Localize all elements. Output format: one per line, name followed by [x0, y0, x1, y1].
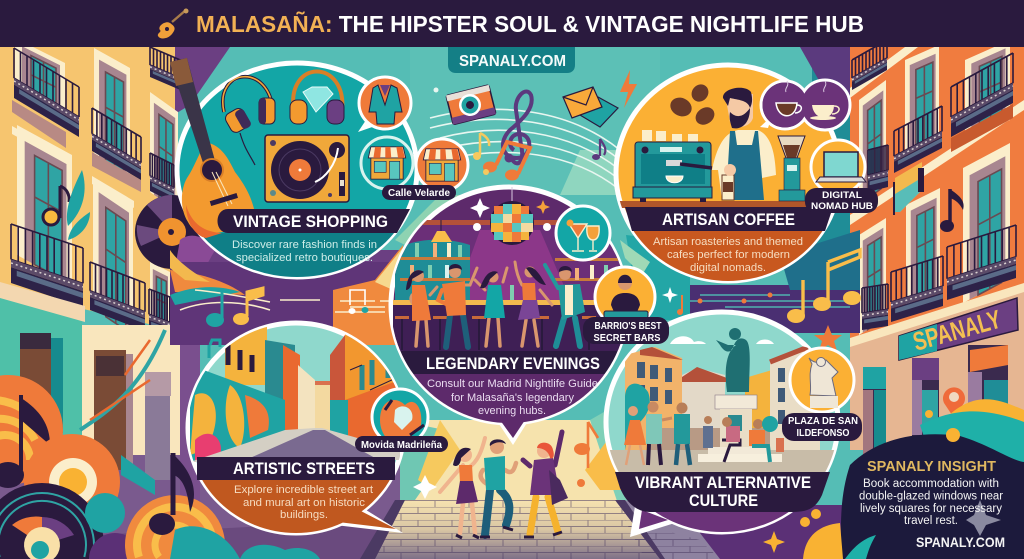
- panel: artistic streets: [188, 320, 448, 540]
- banner: artisan coffee: [625, 207, 833, 231]
- text: legendary evenings description: for Malasaña's legendary: [451, 392, 574, 404]
- heading: spanaly insight: SPANALY INSIGHT: [867, 458, 996, 475]
- illustration: bar interior: [393, 186, 627, 351]
- icon: laptop badge: [811, 140, 866, 194]
- icon: barista: [712, 88, 776, 200]
- dancer: man in teal shirt: [480, 439, 516, 537]
- label: plaza de san ildefonso: PLAZA DE SAN: [788, 416, 858, 427]
- banner: artisan coffee: ARTISAN COFFEE: [662, 210, 795, 229]
- text: vintage shopping description: specialized retro boutiques.: [236, 252, 373, 264]
- text: vintage shopping description: [232, 239, 377, 264]
- label: digital nomad hub: DIGITAL: [822, 190, 862, 201]
- text: legendary evenings description: [427, 378, 598, 417]
- text: artisan coffee description: Artisan roasteries and themed: [653, 236, 803, 248]
- icon: cocktails badge: [556, 206, 610, 260]
- dancers: bar crowd: [406, 262, 585, 347]
- icon: statue badge: [790, 348, 854, 412]
- panel: vibrant alternative culture: [605, 312, 862, 542]
- icon: shop badge teal: [361, 137, 413, 189]
- icon: headphones and diamond: [290, 72, 344, 124]
- label: barrio's best secret bars: [583, 317, 669, 344]
- icon: vinyl record: [135, 195, 215, 269]
- text: artisan coffee description: digital nomads.: [690, 262, 766, 274]
- icon: flag on balcony: [894, 162, 924, 215]
- text: insight body: Book accommodation with: [863, 478, 999, 490]
- icon: coffee grinder: [778, 136, 805, 201]
- banner: artistic streets: [197, 457, 395, 480]
- icon: turntable: [265, 135, 349, 202]
- text: insight body: lively squares for necessary: [860, 503, 1002, 515]
- banner: vibrant alternative culture: CULTURE: [689, 491, 758, 510]
- lower left music decoration: [0, 375, 320, 559]
- label: movida madrileña: [355, 436, 448, 452]
- header bar: [0, 0, 1024, 47]
- left building: [0, 38, 215, 342]
- cobblestone street: [360, 500, 720, 559]
- dancer: woman in purple skirt: [440, 438, 485, 538]
- icon: shop badge orange: [416, 139, 468, 191]
- icon: map pin: [943, 387, 965, 418]
- text: artisan coffee description: cafes perfect for modern: [667, 249, 790, 261]
- illustration: statue on pedestal: [698, 328, 782, 462]
- text: artistic streets description: [234, 484, 373, 521]
- icon: headphones black: [223, 77, 275, 165]
- icon: small notes: [473, 133, 605, 175]
- bottom right accent shapes: [763, 509, 843, 559]
- footer brand: SPANALY.COM: [916, 535, 1005, 550]
- label: barrio's best secret bars: BARRIO'S BEST: [594, 321, 662, 332]
- icon: music note right wall: [940, 189, 964, 232]
- icon: espresso machine: [633, 130, 712, 202]
- text: legendary evenings description: evening hubs.: [478, 405, 546, 417]
- text: insight body: double-glazed windows near: [859, 490, 1003, 502]
- icon: lightning: [620, 70, 637, 108]
- music staff and floating icons: [410, 47, 660, 195]
- lower left storefront: [0, 282, 200, 505]
- icon: guitar: [170, 58, 256, 238]
- text: insight body: travel rest.: [904, 515, 958, 527]
- text: vintage shopping description: Discover rare fashion finds in: [232, 239, 377, 251]
- heading: legendary evenings: LEGENDARY EVENINGS: [426, 354, 600, 373]
- label: movida madrileña: Movida Madrileña: [361, 439, 442, 451]
- label: barrio's best secret bars: SECRET BARS: [594, 333, 661, 344]
- right building: [850, 40, 1024, 345]
- panel: legendary evenings: [391, 186, 669, 445]
- title: MALASAÑA: THE HIPSTER SOUL & VINTAGE NIGHTLIFE HUB: [196, 10, 864, 37]
- banner: vibrant alternative culture: VIBRANT ALTERNATIVE: [635, 473, 811, 492]
- brand badge: [448, 47, 575, 73]
- text: legendary evenings description: Consult our Madrid Nightlife Guide: [427, 378, 598, 390]
- icon: disco ball: [490, 186, 534, 245]
- icon: camera: [446, 85, 496, 125]
- dancer: woman in orange dress: [406, 270, 437, 346]
- dancer: man in teal jacket: [545, 265, 585, 346]
- icon: guitar: [158, 8, 188, 38]
- icon: orange beamed note: [483, 142, 530, 180]
- illustration: street and murals: [190, 320, 405, 540]
- text: artisan coffee description: [653, 236, 803, 274]
- banner: vintage shopping: [218, 209, 410, 233]
- text: insight body: [859, 478, 1003, 527]
- bright rays and notes between bubbles: [170, 230, 861, 499]
- illustration: plaza and statue: [610, 328, 834, 532]
- banner: vibrant alternative culture: [615, 472, 830, 512]
- dancer: woman in purple skirt: [515, 262, 552, 346]
- panel: artisan coffee: [610, 65, 878, 286]
- icon: coffee beans: [670, 84, 714, 125]
- panel: spanaly insight: [841, 399, 1024, 559]
- label: digital nomad hub: [805, 188, 878, 213]
- icon: music note left wall: [43, 170, 90, 240]
- dancer: woman in purple coat: [523, 432, 568, 537]
- label: digital nomad hub: NOMAD HUB: [811, 201, 873, 212]
- brand badge: SPANALY.COM: [459, 53, 566, 70]
- banner: vintage shopping: VINTAGE SHOPPING: [233, 212, 388, 231]
- text: artistic streets description: and mural art on historic: [243, 497, 366, 509]
- icon: jacket badge: [358, 77, 411, 132]
- label: plaza de san ildefonso: ILDEFONSO: [796, 428, 850, 439]
- label: plaza de san ildefonso: [782, 413, 862, 441]
- dancer: woman in teal dress: [475, 268, 507, 346]
- text: artistic streets description: Explore incredible street art: [234, 484, 373, 496]
- banner: artistic streets: ARTISTIC STREETS: [233, 459, 375, 478]
- illustration: people standing: [624, 402, 784, 465]
- dancers on the street: [440, 432, 568, 538]
- label: calle velarde: Calle Velarde: [388, 187, 450, 199]
- panel: vintage shopping: [170, 58, 468, 283]
- text: artistic streets description: buildings.: [280, 509, 328, 521]
- right storefront: [850, 283, 1024, 465]
- icon: coffee cups badges: [760, 80, 850, 130]
- icon: envelopes: [563, 87, 618, 127]
- icon: treble clef: [503, 91, 532, 163]
- icon: movida mural badge: [372, 389, 428, 445]
- dancer: man in orange shirt: [438, 264, 477, 347]
- icon: dj badge: [595, 267, 655, 327]
